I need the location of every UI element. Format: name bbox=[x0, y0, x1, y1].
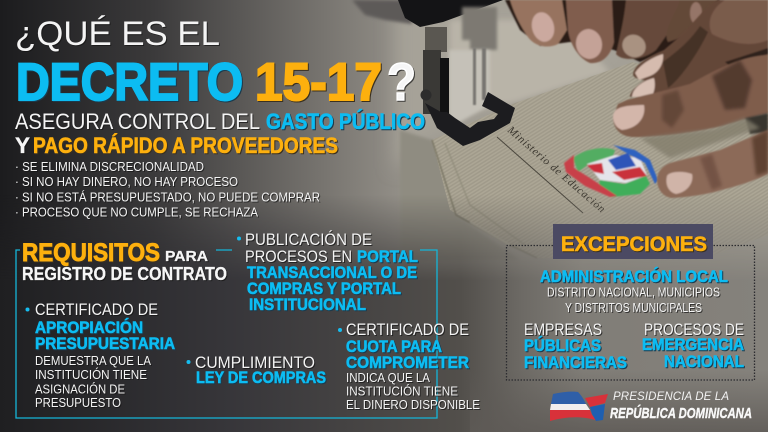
item: publicacion de procesos: PORTAL bbox=[357, 248, 418, 266]
administracion local: Y DISTRITOS MUNICIPALES bbox=[565, 301, 702, 315]
empresas publicas financieras bbox=[524, 321, 627, 372]
item: certificado de apropiacion: INSTITUCIÓN TIENE bbox=[35, 367, 147, 382]
embroidered text: Ministerio de Educación bbox=[504, 124, 608, 216]
item: certificado de apropiacion: PRESUPUESTO bbox=[35, 395, 121, 410]
procesos de emergencia nacional: NACIONAL bbox=[664, 353, 744, 371]
stitched line bbox=[497, 137, 583, 213]
title: ? bbox=[387, 53, 416, 112]
left fabric below machine bbox=[400, 130, 520, 260]
title: ¿QUÉ ES EL bbox=[15, 15, 220, 53]
text block: key points bbox=[15, 159, 320, 220]
lower right darkening bbox=[470, 370, 768, 432]
administracion local: ADMINISTRACIÓN LOCAL bbox=[540, 267, 728, 286]
item: certificado de cuota: CERTIFICADO DE bbox=[346, 321, 469, 339]
panel: requisitos bbox=[16, 230, 480, 418]
item: certificado de apropiacion: PRESUPUESTARIA bbox=[35, 335, 175, 353]
item: publicacion de procesos bbox=[237, 230, 418, 314]
right hand bbox=[613, 0, 768, 198]
rear rod bbox=[462, 7, 497, 50]
dotted frame bbox=[506, 246, 754, 380]
subtitle: ASEGURA CONTROL DEL bbox=[15, 109, 260, 134]
text block: key points: · SE ELIMINA DISCRECIONALIDAD bbox=[15, 159, 204, 174]
glass guard and needle bbox=[449, 50, 490, 125]
title: 15-17 bbox=[255, 53, 382, 112]
subtitle: PAGO RÁPIDO A PROVEEDORES bbox=[33, 133, 338, 158]
excepciones heading bbox=[553, 224, 713, 259]
item: certificado de cuota: INSTITUCIÓN TIENE bbox=[346, 384, 458, 398]
procesos de emergencia nacional: EMERGENCIA bbox=[642, 336, 744, 354]
fingertips bbox=[635, 54, 663, 80]
administracion local: DISTRITO NACIONAL, MUNICIPIOS bbox=[547, 286, 720, 300]
middle finger bbox=[613, 55, 768, 137]
requisitos heading: PARA bbox=[165, 248, 208, 265]
item: certificado de apropiacion: ASIGNACIÓN DE bbox=[35, 382, 125, 396]
diagonal fold highlight bbox=[470, 222, 510, 245]
back of the hand bbox=[630, 0, 768, 97]
subtitle bbox=[15, 109, 425, 158]
icon: dominican flag bbox=[550, 392, 608, 421]
title: DECRETO bbox=[16, 53, 243, 112]
item: certificado de cuota: CUOTA PARA bbox=[346, 338, 442, 356]
machine head bbox=[352, 0, 412, 24]
item: certificado de apropiacion: APROPIACIÓN bbox=[35, 318, 143, 337]
item: publicacion de procesos: PUBLICACIÓN DE bbox=[245, 230, 372, 249]
empresas publicas financieras: PÚBLICAS bbox=[524, 336, 601, 355]
pocket seam shadow bbox=[432, 140, 537, 258]
item: publicacion de procesos: PROCESOS EN bbox=[245, 248, 352, 266]
item: certificado de cuota: INDICA QUE LA bbox=[346, 370, 430, 385]
text block: key points: · SI NO ESTÁ PRESUPUESTADO, NO PUEDE COMPRAR bbox=[15, 190, 320, 204]
item: certificado de apropiacion: DEMUESTRA QUE LA bbox=[35, 353, 151, 368]
subtitle: GASTO PÚBLICO bbox=[266, 109, 425, 134]
item: cumplimiento ley de compras: CUMPLIMIENTO bbox=[195, 354, 315, 372]
subtitle: Y bbox=[15, 133, 30, 158]
item: certificado de apropiacion: CERTIFICADO DE bbox=[35, 301, 158, 319]
top fingers bbox=[505, 0, 720, 63]
administracion local bbox=[540, 267, 728, 315]
procesos de emergencia nacional: PROCESOS DE bbox=[644, 321, 744, 339]
requisitos heading bbox=[22, 239, 227, 284]
requisitos heading: REQUISITOS bbox=[22, 239, 160, 267]
pocket fabric bbox=[432, 62, 768, 260]
upper fabric bbox=[395, 0, 640, 170]
text block: key points: · SI NO HAY DINERO, NO HAY PROCESO bbox=[15, 174, 238, 189]
lower panel gradient bbox=[106, 202, 768, 432]
emblem bbox=[564, 145, 658, 197]
excepciones heading: EXCEPCIONES bbox=[561, 232, 707, 256]
item: cumplimiento ley de compras bbox=[186, 354, 326, 387]
empresas publicas financieras: FINANCIERAS bbox=[524, 354, 627, 372]
empresas publicas financieras: EMPRESAS bbox=[524, 321, 602, 339]
item: publicacion de procesos: INSTITUCIONAL bbox=[249, 296, 366, 314]
logo: presidencia de la republica dominicana bbox=[550, 391, 752, 422]
item: cumplimiento ley de compras: LEY DE COMPRAS bbox=[196, 369, 326, 387]
requisitos heading: REGISTRO DE CONTRATO bbox=[22, 264, 227, 284]
item: publicacion de procesos: TRANSACCIONAL O DE bbox=[247, 264, 417, 282]
shadow gap bbox=[745, 113, 768, 134]
text block: key points: · PROCESO QUE NO CUMPLE, SE RECHAZA bbox=[15, 204, 258, 220]
panel frame bbox=[16, 250, 437, 418]
logo: presidencia de la republica dominicana: PRESIDENCIA DE LA bbox=[613, 391, 729, 403]
item: certificado de cuota bbox=[338, 321, 480, 412]
item: certificado de cuota: EL DINERO DISPONIBLE bbox=[346, 397, 480, 412]
thumb bbox=[657, 130, 768, 198]
title bbox=[15, 15, 416, 112]
presser foot bbox=[425, 92, 515, 146]
procesos de emergencia nacional bbox=[642, 321, 744, 371]
presser bar bbox=[425, 27, 447, 52]
item: publicacion de procesos: COMPRAS Y PORTAL bbox=[247, 280, 401, 298]
item: certificado de apropiacion bbox=[26, 301, 175, 410]
panel: excepciones bbox=[506, 224, 754, 380]
item: certificado de cuota: COMPROMETER bbox=[346, 354, 469, 372]
